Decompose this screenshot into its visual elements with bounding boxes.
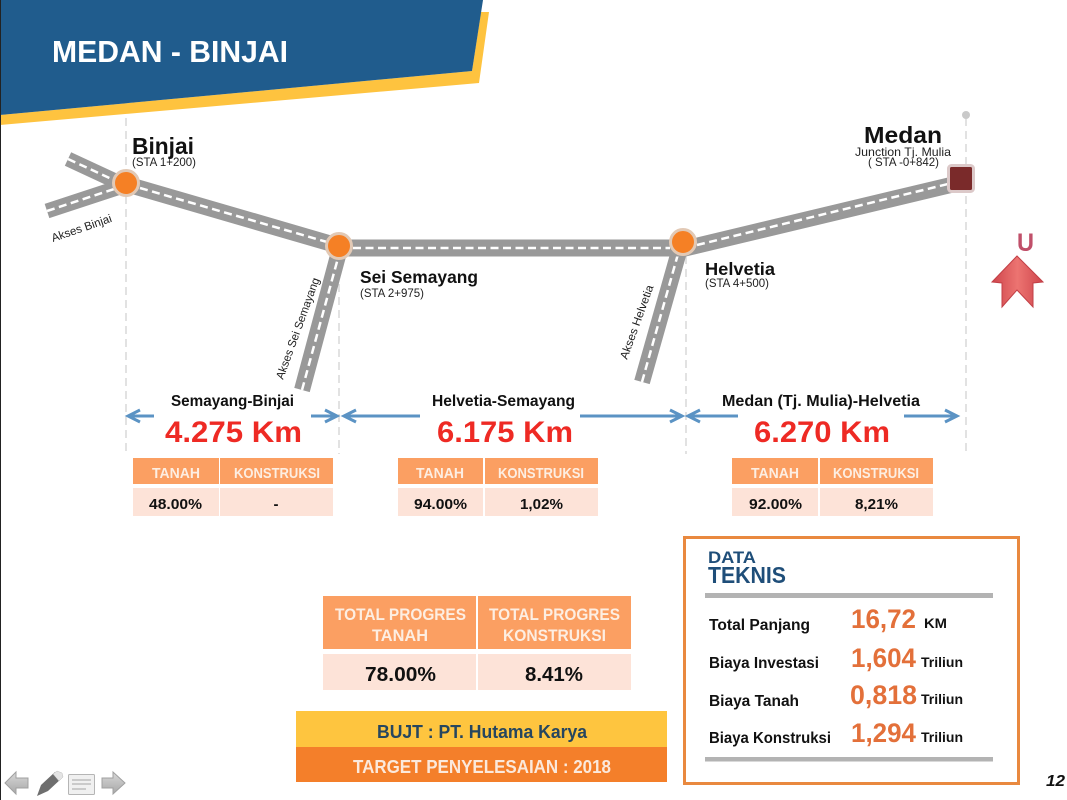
- arrow: left: [128, 410, 154, 422]
- node: Sei Semayang: [326, 234, 352, 258]
- banner: target: [296, 747, 667, 782]
- label: Akses Helvetia: Akses Helvetia: [619, 283, 657, 361]
- icon: next arrow: [102, 772, 125, 794]
- arrow: right: [904, 410, 957, 422]
- row: biaya tanah: Biaya Tanah: [709, 693, 799, 710]
- label: Akses Binjai: Akses Binjai: [50, 213, 114, 245]
- table: Helvetia-Semayang progress: 94.00%: [414, 496, 467, 513]
- icon: previous arrow: [5, 772, 28, 794]
- row: biaya investasi: [709, 643, 963, 673]
- label: Medan: ( STA -0+842): [868, 155, 939, 169]
- table: Medan-Helvetia progress: [732, 458, 933, 516]
- table: Helvetia-Semayang progress: KONSTRUKSI: [498, 465, 584, 482]
- row: total panjang: 16,72: [851, 604, 916, 634]
- label: Medan: Medan: [864, 122, 942, 148]
- row: total panjang: Total Panjang: [709, 617, 810, 634]
- table: total progress: 78.00%: [365, 664, 436, 686]
- row: biaya konstruksi: Triliun: [921, 729, 963, 745]
- label: Sei Semayang: (STA 2+975): [360, 286, 424, 300]
- row: biaya tanah: 0,818: [850, 680, 917, 710]
- icon: north arrow: U: [1017, 229, 1034, 257]
- label: Sei Semayang: [360, 267, 478, 300]
- banner: target: TARGET PENYELESAIAN : 2018: [353, 757, 611, 777]
- segment: Semayang-Binjai: Semayang-Binjai: [171, 393, 294, 410]
- page number: 12: [1046, 773, 1065, 790]
- banner: BUJT: [296, 711, 667, 747]
- heading: DATA: [708, 548, 756, 567]
- heading: [708, 548, 786, 588]
- road: Akses Binjai: [47, 159, 126, 211]
- row: biaya investasi: Biaya Investasi: [709, 655, 819, 672]
- road: Akses Helvetia: [642, 248, 680, 382]
- label: Helvetia: Helvetia: [705, 259, 775, 279]
- table: Medan-Helvetia progress: 92.00%: [749, 496, 802, 513]
- arrow: right: [311, 410, 337, 422]
- table: Helvetia-Semayang progress: [398, 458, 598, 516]
- label: Akses Sei Semayang: Akses Sei Semayang: [275, 276, 322, 381]
- row: biaya konstruksi: 1,294: [851, 718, 916, 748]
- segment: Semayang-Binjai: [128, 393, 337, 449]
- table: Helvetia-Semayang progress: 1,02%: [520, 496, 563, 513]
- navigation icons: [5, 771, 125, 796]
- node: Medan: [948, 166, 974, 192]
- node: Helvetia: [670, 230, 696, 254]
- row: biaya investasi: 1,604: [851, 643, 916, 673]
- road: main Helvetia to Medan: [683, 184, 955, 249]
- label: Medan: Junction Tj. Mulia: [855, 145, 951, 159]
- row: biaya tanah: Triliun: [921, 691, 963, 707]
- label: Sei Semayang: Sei Semayang: [360, 267, 478, 287]
- node: Binjai: [114, 170, 138, 196]
- road: main Sei Semayang to Helvetia: [339, 240, 683, 256]
- table: Semayang-Binjai progress: -: [274, 496, 278, 513]
- row: biaya investasi: Triliun: [921, 654, 963, 670]
- table: total progress: TANAH: [372, 626, 428, 645]
- road: Akses Sei Semayang: [302, 252, 339, 390]
- title: MEDAN - BINJAI: [52, 34, 288, 69]
- table: Semayang-Binjai progress: 48.00%: [149, 496, 202, 513]
- table: total progress: KONSTRUKSI: [503, 626, 606, 645]
- table: total progress: TOTAL PROGRES: [489, 605, 620, 624]
- table: Helvetia-Semayang progress: TANAH: [416, 465, 464, 482]
- arrow: left: [344, 410, 420, 422]
- table: Semayang-Binjai progress: [133, 458, 333, 516]
- distance: 4.275 Km: [165, 416, 302, 449]
- panel: data teknis: [684, 538, 1018, 784]
- distance: 6.175 Km: [437, 416, 573, 449]
- label: Binjai: (STA 1+200): [132, 155, 196, 169]
- row: total panjang: [709, 604, 947, 634]
- table: total progress: TOTAL PROGRES: [335, 605, 466, 624]
- table: total progress: [323, 596, 631, 690]
- table: Semayang-Binjai progress: KONSTRUKSI: [234, 465, 320, 482]
- row: biaya tanah: [709, 680, 963, 710]
- row: total panjang: KM: [924, 615, 947, 631]
- label: Medan: [855, 122, 951, 169]
- arrow: left: [688, 410, 738, 422]
- segment: Medan-Helvetia: Medan (Tj. Mulia)-Helvetia: [722, 393, 920, 410]
- road: main Binjai to Sei Semayang: [126, 184, 339, 246]
- icon: north arrow: [992, 229, 1043, 307]
- label: Helvetia: (STA 4+500): [705, 276, 769, 290]
- row: biaya konstruksi: [709, 718, 963, 748]
- table: Medan-Helvetia progress: KONSTRUKSI: [833, 465, 919, 482]
- segment: Helvetia-Semayang: [344, 393, 682, 449]
- segment: Helvetia-Semayang: Helvetia-Semayang: [432, 393, 575, 410]
- row: biaya konstruksi: Biaya Konstruksi: [709, 730, 831, 747]
- heading: TEKNIS: [708, 562, 786, 588]
- table: Medan-Helvetia progress: TANAH: [751, 465, 799, 482]
- table: total progress: 8.41%: [525, 664, 583, 686]
- road map: [47, 159, 974, 390]
- icon: note: [68, 774, 94, 794]
- distance: 6.270 Km: [754, 416, 890, 449]
- icon: pen: [37, 771, 63, 796]
- label: Binjai: Binjai: [132, 133, 194, 159]
- segment: Medan-Helvetia: [688, 393, 957, 449]
- arrow: right: [580, 410, 682, 422]
- table: Semayang-Binjai progress: TANAH: [152, 465, 200, 482]
- banner: BUJT: BUJT : PT. Hutama Karya: [377, 722, 588, 742]
- header banner: [0, 0, 489, 125]
- table: Medan-Helvetia progress: 8,21%: [855, 496, 898, 513]
- label: Helvetia: [705, 259, 775, 290]
